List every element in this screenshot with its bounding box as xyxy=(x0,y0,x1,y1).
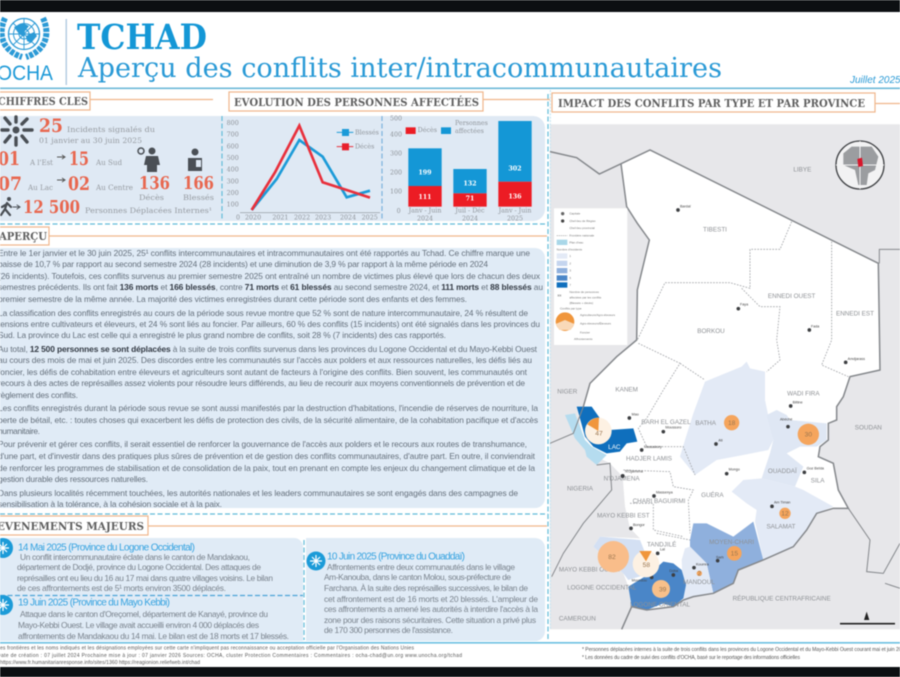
map labels: ENNEDI EST xyxy=(836,311,874,318)
map: N'Djamena xyxy=(625,470,644,474)
legend: Affrontements xyxy=(574,337,593,341)
impact circles: 18 xyxy=(728,420,736,427)
event: 14 mai: de ces affrontements est de 5¹ morts environ 3500 déplacés. xyxy=(17,583,226,593)
heading: evolution xyxy=(229,92,550,111)
map labels: WADI FIRA xyxy=(787,391,820,398)
chart: line chart of dead and wounded: 2022 xyxy=(294,214,310,221)
event: 14 mai: Un conflit intercommunautaire éclate dans le canton de Mandakaou, xyxy=(20,552,250,562)
impact circles: 12 xyxy=(781,511,789,518)
chart: line chart of dead and wounded: 800 xyxy=(227,120,239,127)
map: Amdjarass xyxy=(848,357,865,361)
map labels: BORKOU xyxy=(697,328,725,335)
chart: stacked bar chart: 302 xyxy=(508,166,522,173)
panel: chiffres clés: Au Lac xyxy=(27,184,53,192)
text block: aperçu: recours à des actes de représailles assez violents pour résoudre leurs différends, au lieu de recourir aux moyens conventionnels de prévention et de xyxy=(0,378,525,388)
impact circles: 82 xyxy=(608,554,616,561)
map: Fada xyxy=(811,325,820,329)
chart: stacked bar chart: Décès xyxy=(418,126,437,134)
chart: line chart of dead and wounded: 2021 xyxy=(272,213,288,221)
map labels: LAC xyxy=(608,444,621,451)
legend: Agriculteurs/Agro-éleveurs xyxy=(580,313,616,317)
province: Salamat xyxy=(732,478,833,560)
text block: aperçu: perte de bétail, etc. : toutes choses qui exacerbent les défis de protection des civils, de la sécurité alimentaire, de la cohabitation pacifique et d'accès xyxy=(0,415,538,425)
heading: chiffres clés: CHIFFRES CLES xyxy=(0,95,88,108)
impact circles xyxy=(585,415,819,598)
event: 19 juin: Mayo-Kebbi Ouest. Le village avait accueilli environ 4 000 déplacés des xyxy=(18,620,259,630)
chart: stacked bar chart: 200 xyxy=(390,170,402,177)
panel: chiffres clés: Incidents signalés du xyxy=(67,126,156,134)
towns xyxy=(621,208,847,579)
chart: line chart of dead and wounded: 400 xyxy=(227,166,239,174)
text block: aperçu: sensibilisation à la tolérance, à la cohésion sociale et à la paix. xyxy=(0,499,222,509)
heading: impact xyxy=(552,93,900,112)
map: Ati xyxy=(718,439,723,443)
text block: aperçu: Pour prévenir et gérer ces conflits, il serait essentiel de renforcer la gouvernance de l'accès aux polders et le recours aux routes de transhumance, xyxy=(0,439,527,449)
map labels: LOGONE ORIENTAL xyxy=(630,601,690,608)
map labels: CAMEROUN xyxy=(559,616,596,623)
legend: 3 xyxy=(569,269,571,273)
chart: line chart of dead and wounded: 200 xyxy=(227,190,239,197)
text block: aperçu: Dans plusieurs localités récemment touchées, les autorités nationales et les leaders communautaires se sont engagés dans des campagnes de xyxy=(0,488,518,498)
legend: Plan d'eau xyxy=(569,241,584,245)
panel: chiffres clés: Au Centre xyxy=(95,184,133,192)
chart: stacked bar chart: 300 xyxy=(390,151,402,158)
map: Doba xyxy=(669,569,679,573)
panel: chiffres clés xyxy=(0,115,214,218)
text block: aperçu: d'une part, et d'investir dans des pratiques plus sûres de prévention et de gestion des conflits communautaires, d'autre part. En outre, il conviendrait xyxy=(0,451,536,461)
legend: Nombre de personnes xyxy=(569,290,599,294)
map: Pala xyxy=(619,549,628,553)
panel: chiffres clés: 01 janvier au 30 juin 2025 xyxy=(39,137,142,145)
map labels: TANDJILÉ xyxy=(647,539,676,548)
province: Mayo Kebbi Ouest xyxy=(593,537,650,580)
legend: Agro-éleveurs/Éleveurs xyxy=(580,321,612,326)
map labels: BARH EL GAZEL xyxy=(641,419,691,426)
map labels: TIBESTI xyxy=(703,227,727,234)
province: Logone xyxy=(628,562,686,610)
impact circles: 58 xyxy=(643,562,650,569)
event: 10 juin: ces affrontements a amené les autorités à interdire l'accès à la xyxy=(324,604,538,614)
chart: stacked bar chart: 100 xyxy=(390,188,402,196)
heading: evolution: EVOLUTION DES PERSONNES AFFECTÉES xyxy=(234,95,479,109)
footer rule xyxy=(0,642,900,644)
heading: aperçu: APERÇU xyxy=(0,230,47,243)
chart: stacked bar chart: 2024 xyxy=(417,214,433,222)
province: Mandoul xyxy=(682,547,713,600)
map xyxy=(550,90,900,629)
legend: Chef-lieu de Région xyxy=(569,219,596,223)
chart: line chart of dead and wounded: 700 xyxy=(227,132,239,139)
map: Sarh xyxy=(716,555,724,559)
icon: displaced walker xyxy=(1,197,20,215)
map labels: SOUDAN xyxy=(855,425,882,432)
icon: event 1 xyxy=(0,538,13,558)
arrow xyxy=(57,155,65,159)
text block: aperçu: baisse de 10,7 % par rapport au second semestre 2024 (28 incidents) et une diminution de 3,9 % par rapport à la même période en 2024 xyxy=(0,259,488,269)
map labels xyxy=(557,167,882,623)
map: Koumra xyxy=(696,562,710,566)
text block: aperçu: de renforcer les programmes de stabilisation et de consolidation de la paix, tout en prenant en compte les enjeux du changement climatique et de la xyxy=(0,463,535,473)
chart: stacked bar chart: 500 xyxy=(390,116,402,123)
event: 14 mai xyxy=(17,542,273,593)
text block: aperçu: Les conflits enregistrés durant la période sous revue se sont aussi manifestés par la destruction d'habitations, l'incendie de réserves de nourriture, la xyxy=(0,403,538,413)
province: Lac xyxy=(577,407,637,453)
event: 19 juin xyxy=(18,598,289,641)
map: Abéché xyxy=(780,418,792,422)
text block: aperçu: tensions entre cultivateurs et éleveurs, et 24 % sont liés au foncier. Par ailleurs, 60 % des conflits (15 incidents) ont été signalés dans les provinces du xyxy=(0,319,540,329)
event: 14 mai: 14 Mai 2025 (Province du Logone Occidental) xyxy=(18,542,195,554)
chart: stacked bar chart: Juil - Déc xyxy=(454,207,485,215)
map labels: HADJER LAMIS xyxy=(626,456,672,463)
chart: stacked bar chart: 136 xyxy=(508,193,522,200)
icon: UN logo xyxy=(2,18,46,57)
text block: aperçu: La classification des conflits enregistrés au cours de la période sous revue montre que 52 % sont de nature intercommunautaire, 24 % résultent de xyxy=(0,308,528,318)
event: 19 juin: 19 Juin 2025 (Province du Mayo Kebbi) xyxy=(18,598,170,608)
stat: blessés: 166 xyxy=(183,173,214,194)
map: Biltine xyxy=(793,401,803,405)
stat: centre: 02 xyxy=(68,173,90,195)
chart: stacked bar chart: 132 xyxy=(463,181,477,188)
arrow xyxy=(57,178,65,182)
panel: chiffres clés: Au Sud xyxy=(95,159,123,167)
impact circles: 30 xyxy=(805,432,812,439)
heading: evenements majeurs xyxy=(0,516,547,535)
chart: line chart of dead and wounded: 600 xyxy=(227,143,239,150)
stat: décès: 136 xyxy=(139,173,170,194)
map: Faya xyxy=(740,303,749,307)
province: Moyen-Chari xyxy=(690,522,763,593)
chart: line chart of dead and wounded: 2020 xyxy=(245,214,261,221)
lake xyxy=(565,413,607,465)
text block: aperçu: foncier, les défis de cohabitation entre éleveurs et agriculteurs sont autant de facteurs à l'origine des conflits. Bien souvent, les communautés ont xyxy=(0,367,528,377)
text block: aperçu: gestion durable des ressources naturelles. xyxy=(0,474,148,484)
panel: chiffres clés: Personnes Déplacées Internes¹ xyxy=(85,207,212,215)
icon: incidents burst xyxy=(2,117,32,145)
map labels: LOGONE OCCIDENTAL xyxy=(567,585,637,592)
map: Moundou xyxy=(632,578,647,582)
heading: evenements majeurs: EVENEMENTS MAJEURS xyxy=(0,520,144,533)
panel: chiffres clés: Décès xyxy=(139,194,164,202)
legend: 7 xyxy=(569,283,571,287)
impact circles: 39 xyxy=(659,586,667,593)
icon: locator globe xyxy=(836,141,884,189)
date: Juillet 2025 xyxy=(849,75,900,86)
map labels: LIBYE xyxy=(793,167,811,174)
map labels: SILA xyxy=(811,477,825,484)
heading: impact: IMPACT DES CONFLITS PAR TYPE ET PAR PROVINCE xyxy=(558,97,865,110)
chart: stacked bar chart: Janv - Juin xyxy=(408,208,441,215)
chart: stacked bar chart: Janv - Juin xyxy=(498,208,531,215)
event: 10 juin: 10 Juin 2025 (Province du Ouaddaï) xyxy=(327,552,465,562)
map labels: MAYO KEBBI EST xyxy=(597,513,650,520)
chart: stacked bar chart: 111 xyxy=(418,194,432,201)
map: Mao xyxy=(632,413,639,417)
map labels: OUADDAÏ xyxy=(768,467,797,475)
header xyxy=(0,17,900,86)
map labels: ENNEDI OUEST xyxy=(768,293,816,300)
footer notes: Date de création : 07 juillet 2024 Prochaine mise à jour : 07 janvier 2026 Sources: OCHA, cluster Protection Commentaires : Commentaires : ocha-chad@un.org www.unocha.org/tchad xyxy=(0,653,462,659)
event: 19 juin: Attaque dans le canton d'Oreçomel, département de Kanayé, province du xyxy=(20,609,268,619)
footer notes: https://www.fr.humanitarianresponse.info/sites/1360 https://reagionion.reliefweb.int/chad xyxy=(0,660,200,666)
map labels: GUÉRA xyxy=(701,490,724,499)
legend: Blessés xyxy=(355,129,379,137)
chart: stacked bar chart: 71 xyxy=(466,196,474,203)
chart: stacked bar chart: Personnes xyxy=(455,120,488,127)
footer notes: Les frontières et les noms indiqués et les désignations employées sur cette carte n'impliquent pas reconnaissance ou acceptation officielle par l'Organisation des Nations Unies xyxy=(0,646,414,652)
legend: 1 xyxy=(569,254,571,258)
legend: Frontière nationale xyxy=(569,234,595,238)
panel backgrounds xyxy=(0,116,545,641)
footer notes: * Personnes déplacées internes à la suite de trois conflits dans les provinces du Logone Occidental et du Mayo-Kebbi Ouest courant mai et juin 2025 xyxy=(582,647,900,653)
event: 10 juin: Farchana. À la suite des représailles successives, le bilan de xyxy=(324,583,528,593)
map labels: N'DJAMENA xyxy=(604,476,640,483)
map labels: CHARI BAGUIRMI xyxy=(633,498,686,505)
map: Bardaï xyxy=(680,205,692,209)
text block: aperçu: règlement des conflits. xyxy=(0,390,78,400)
event: 10 juin: cet affrontement est de 16 morts et 20 blessés. L'ampleur de xyxy=(324,594,538,604)
event: 10 juin: Affrontements entre deux communautés dans le village xyxy=(327,562,515,572)
event: 14 mai: représailles ont eu lieu du 16 au 17 mai dans quatre villages voisins. Le bilan xyxy=(17,573,273,583)
province: Ouaddaï xyxy=(762,410,827,487)
legend: Chef-lieu provincial xyxy=(569,226,595,230)
legend xyxy=(337,129,379,151)
stat: incidents: 25 xyxy=(39,115,63,137)
map labels: KANEM xyxy=(615,387,638,394)
impact circles: 2 xyxy=(697,571,701,578)
event: 10 juin: zone pour des raisons sécuritaires. Cette situation a privé plus xyxy=(324,615,536,625)
chart: line chart of dead and wounded: 500 xyxy=(227,155,239,162)
text block: aperçu: semestres précédents. Ils ont fait 136 morts et 166 blessés, contre 71 morts et 61 blessés au second semestre 2024, et 111 morts et 88 blessés au xyxy=(0,282,543,292)
map: Laï xyxy=(660,548,666,552)
event: 19 juin: affrontements de Mandakaou du 14 mai. Le bilan est de 18 morts et 17 blessés. xyxy=(18,631,289,641)
chart: line chart of dead and wounded: 2024 xyxy=(340,213,356,221)
text block: aperçu xyxy=(0,248,543,509)
province: Batha xyxy=(680,362,773,475)
legend xyxy=(554,208,627,345)
legend: Nombre d'incidents xyxy=(557,248,583,252)
chart: stacked bar chart: affectées xyxy=(455,127,484,135)
legend: 5 xyxy=(569,276,571,280)
chart: stacked bar chart: 0 xyxy=(397,208,401,215)
title: TCHAD xyxy=(77,17,207,58)
event: 10 juin xyxy=(324,552,538,635)
impact circles: 47 xyxy=(595,430,603,437)
map labels: MAYO KEBBI OUEST xyxy=(559,567,621,574)
chart: line chart of dead and wounded: 0 xyxy=(236,214,240,221)
borders xyxy=(550,150,900,629)
footer notes: * Les données du cadre de suivi des conflits d'OCHA, basé sur le reportage des informations officielles xyxy=(582,655,800,661)
map labels: NIGERIA xyxy=(567,486,594,493)
chart: stacked bar chart: 199 xyxy=(418,170,432,177)
text block: aperçu: Sud. La province du Lac est celle qui a enregistré le plus grand nombre de conflits, soit 28 % (7 incidents) des cas rapportés. xyxy=(0,330,446,340)
legend: Décès xyxy=(355,143,374,151)
chart: line chart of dead and wounded: 100 xyxy=(227,201,239,209)
stat: displaced people: 12 500 xyxy=(23,197,80,218)
legend: (Blessés + décès) xyxy=(569,301,593,305)
map: Massakory xyxy=(644,445,662,449)
panel: chiffres clés: Blessés xyxy=(183,194,214,202)
map: Mongo xyxy=(729,468,740,472)
map labels: MANDOUL xyxy=(683,579,715,586)
map: Moussoro xyxy=(665,426,681,430)
legend: XX xyxy=(557,294,561,298)
legend: affectées par les conflits xyxy=(569,295,602,299)
map labels: MOYEN-CHARI xyxy=(709,539,754,546)
icon: deaths xyxy=(138,148,160,172)
map labels: RÉPUBLIQUE CENTRAFRICAINE xyxy=(733,594,831,603)
event: 10 juin: de 170 300 personnes de l'assistance. xyxy=(324,625,453,635)
legend: Conflits par type xyxy=(560,307,582,311)
heading: chiffres clés xyxy=(0,92,213,110)
chart: stacked bar chart: 2025 xyxy=(507,215,523,222)
icon: event 3 xyxy=(306,552,326,570)
text block: aperçu: Au total, 12 500 personnes se sont déplacées à la suite de trois conflits survenus dans les provinces du Logone Occidental et du Mayo-Kebbi Ouest xyxy=(0,344,538,354)
footer notes xyxy=(0,646,900,666)
chart: line chart of dead and wounded xyxy=(227,120,380,221)
legend: Foncier xyxy=(580,330,590,334)
legend: 2 xyxy=(569,261,571,265)
impact circles: 15 xyxy=(731,551,738,558)
event: 10 juin: Am-Kanouba, dans le canton Molou, sous-préfecture de xyxy=(324,572,511,582)
text block: aperçu: premier semestre de la même année. La majorité des victimes enregistrées durant cette période sont des enfants et des femmes. xyxy=(0,294,467,304)
chart: stacked bar chart: 2024 xyxy=(462,214,478,222)
map: Massenya xyxy=(656,491,674,495)
text block: aperçu: au cours des mois de mai et juin 2025. Des discordes entre les communautés sur l'accès aux polders et aux ressources naturelles, les défis liés au xyxy=(0,355,532,365)
chart: line chart of dead and wounded: 2023 xyxy=(315,214,331,221)
text block: aperçu: (26 incidents). Toutefois, ces conflits survenus au premier semestre 2025 ont entraîné un nombre de victimes plus élevé que lors de chacun des deux xyxy=(0,271,541,281)
text block: aperçu: Entre le 1er janvier et le 30 juin 2025, 25¹ conflits intercommunautaires et intracommunautaires ont été rapportés au Tchad. Ce chiffre marque une xyxy=(0,248,530,258)
panel: chiffres clés: A l'Est xyxy=(29,159,53,167)
legend: Capitale xyxy=(569,212,581,216)
chart: stacked bar chart: 400 xyxy=(390,131,402,139)
chart: line chart of dead and wounded: 300 xyxy=(227,178,239,185)
heading: aperçu xyxy=(0,227,547,245)
subtitle: Aperçu des conflits inter/intracommunautaires xyxy=(77,53,722,84)
map: Goz Beïda xyxy=(807,467,825,471)
icon: event 2 xyxy=(0,595,13,615)
event: 14 mai: département de Dodjé, province du Logone Occidental. Des attaques de xyxy=(17,562,261,572)
icon: wounded xyxy=(188,148,202,171)
Chad territory xyxy=(577,150,880,610)
map: Am Timan xyxy=(774,501,790,505)
map: Bongor xyxy=(633,523,646,527)
scale bar xyxy=(840,621,895,626)
stat: sud: 15 xyxy=(69,148,89,170)
icon: north arrow xyxy=(864,612,869,620)
map labels: NIGER xyxy=(557,388,578,395)
panel: événements majeurs xyxy=(0,538,538,641)
map labels: SALAMAT xyxy=(766,523,796,530)
map labels: BATHA xyxy=(695,420,717,427)
chart: stacked bar chart xyxy=(390,116,532,222)
chart: line chart of dead and wounded: 2025 xyxy=(362,214,378,221)
